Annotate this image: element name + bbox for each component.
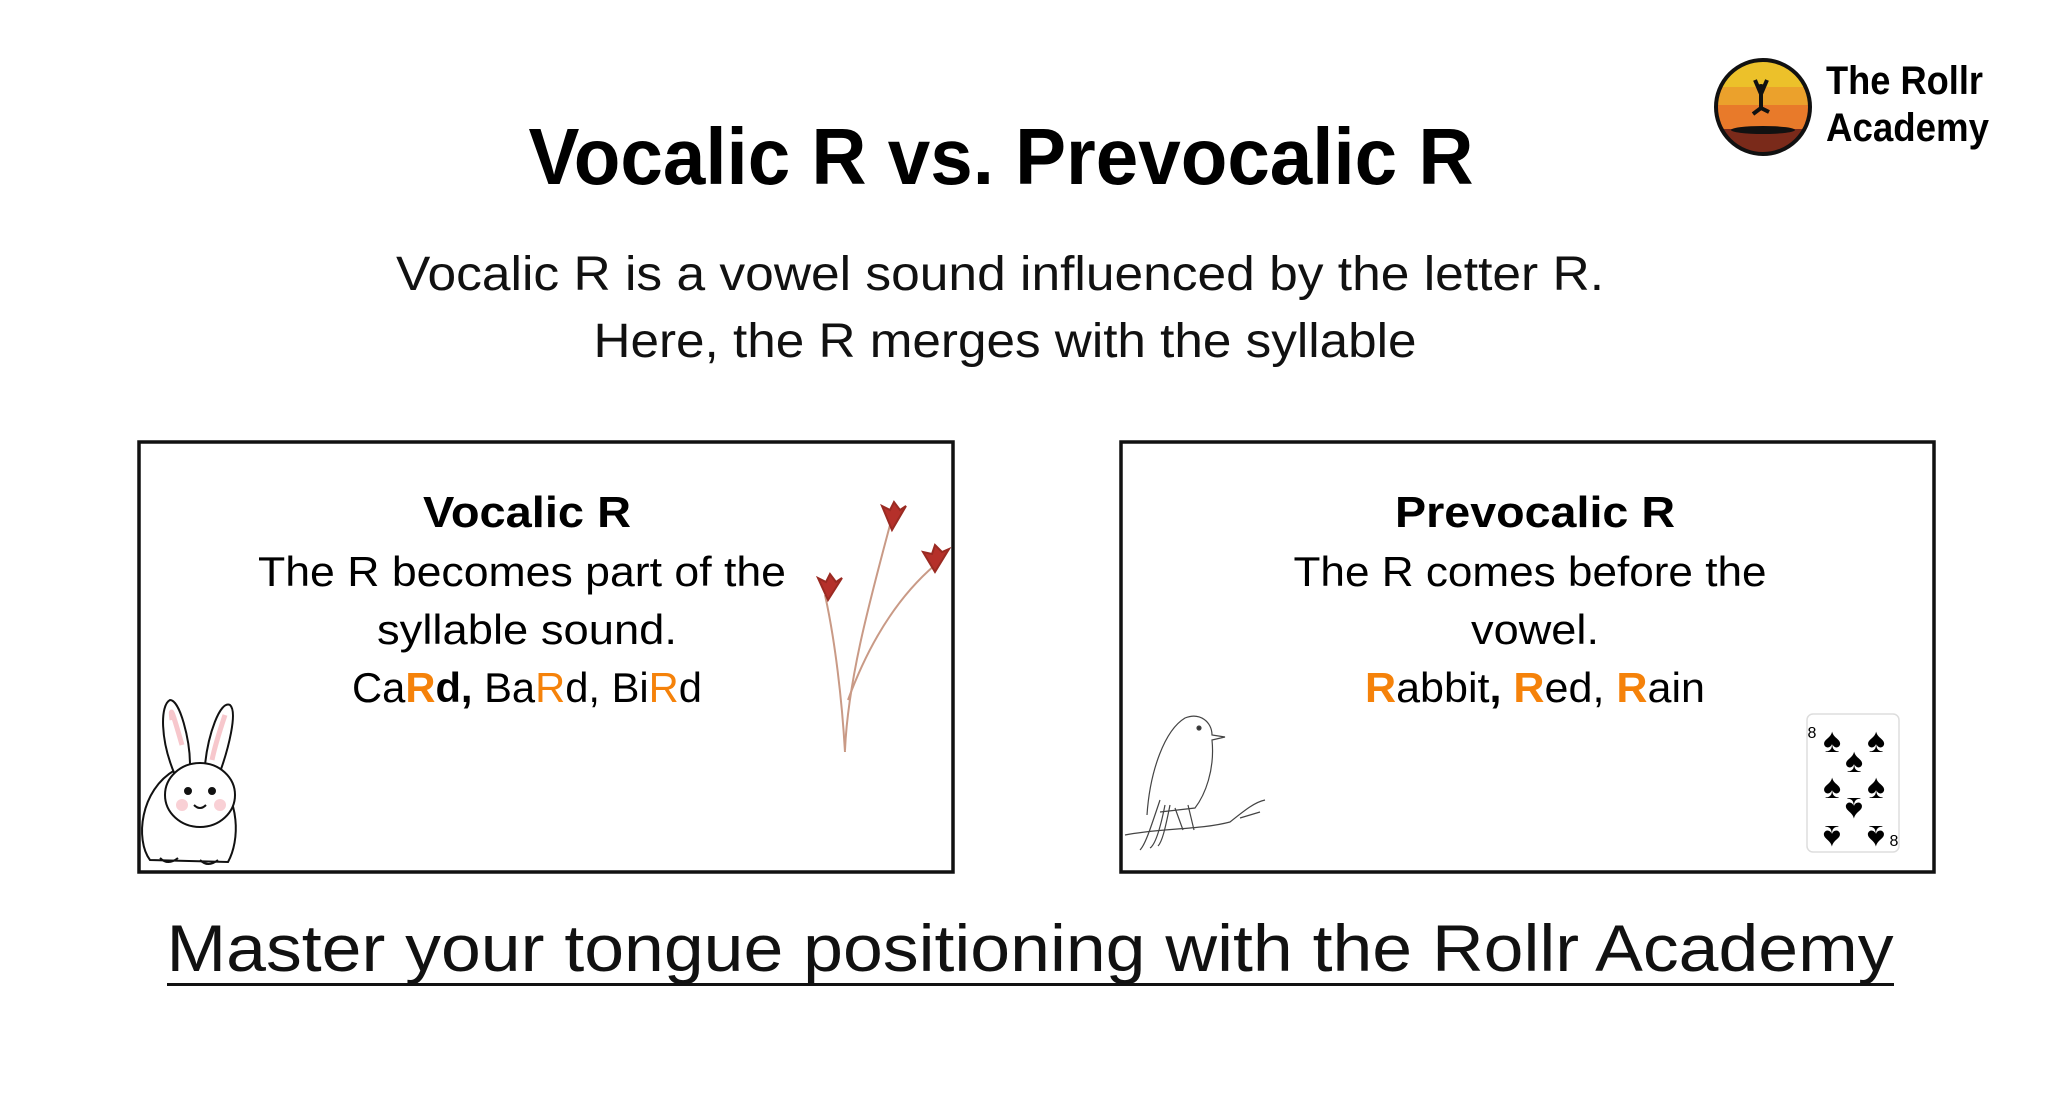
body text: syllable sound. bbox=[377, 606, 677, 653]
icon: eight of spades card: ♠ bbox=[1845, 742, 1863, 780]
icon: eight of spades card: 8 bbox=[1890, 833, 1899, 850]
icon: bunny bbox=[142, 700, 236, 864]
panel: vocalic R bbox=[139, 442, 953, 872]
icon: eight of spades card bbox=[1807, 714, 1899, 856]
body text: The R comes before the bbox=[1294, 548, 1766, 595]
logo: Academy bbox=[1826, 106, 1990, 150]
subtitle: Vocalic R is a vowel sound influenced by the letter R. bbox=[396, 248, 1604, 301]
heading: prevocalic R: Prevocalic R bbox=[1395, 488, 1675, 537]
icon: eight of spades card: ♠ bbox=[1823, 768, 1841, 806]
logo: The Rollr bbox=[1826, 59, 1983, 103]
body text: Rabbit, Red, Rain bbox=[1365, 664, 1705, 711]
icon: eight of spades card: ♠ bbox=[1867, 818, 1885, 856]
panel: prevocalic R bbox=[1121, 442, 1934, 872]
icon: eight of spades card: ♠ bbox=[1823, 818, 1841, 856]
body text bbox=[258, 548, 786, 711]
heading: vocalic R: Vocalic R bbox=[423, 488, 631, 537]
subtitle bbox=[396, 248, 1604, 368]
icon: flowers bbox=[818, 502, 949, 752]
icon: eight of spades card: ♠ bbox=[1867, 768, 1885, 806]
icon: eight of spades card: ♠ bbox=[1867, 722, 1885, 760]
body text bbox=[1294, 548, 1766, 711]
body text: The R becomes part of the bbox=[258, 548, 786, 595]
icon: eight of spades card: ♠ bbox=[1845, 790, 1863, 828]
icon: eight of spades card: 8 bbox=[1808, 725, 1817, 742]
footer call to action: Master your tongue positioning with the Rollr Academy bbox=[166, 911, 1893, 985]
logo bbox=[1715, 59, 1990, 155]
icon: bird sketch bbox=[1125, 716, 1265, 850]
body text: vowel. bbox=[1471, 606, 1599, 653]
title: Vocalic R vs. Prevocalic R bbox=[528, 112, 1474, 201]
subtitle: Here, the R merges with the syllable bbox=[594, 315, 1416, 368]
icon: eight of spades card: ♠ bbox=[1823, 722, 1841, 760]
body text: CaRd, BaRd, BiRd bbox=[352, 664, 702, 711]
